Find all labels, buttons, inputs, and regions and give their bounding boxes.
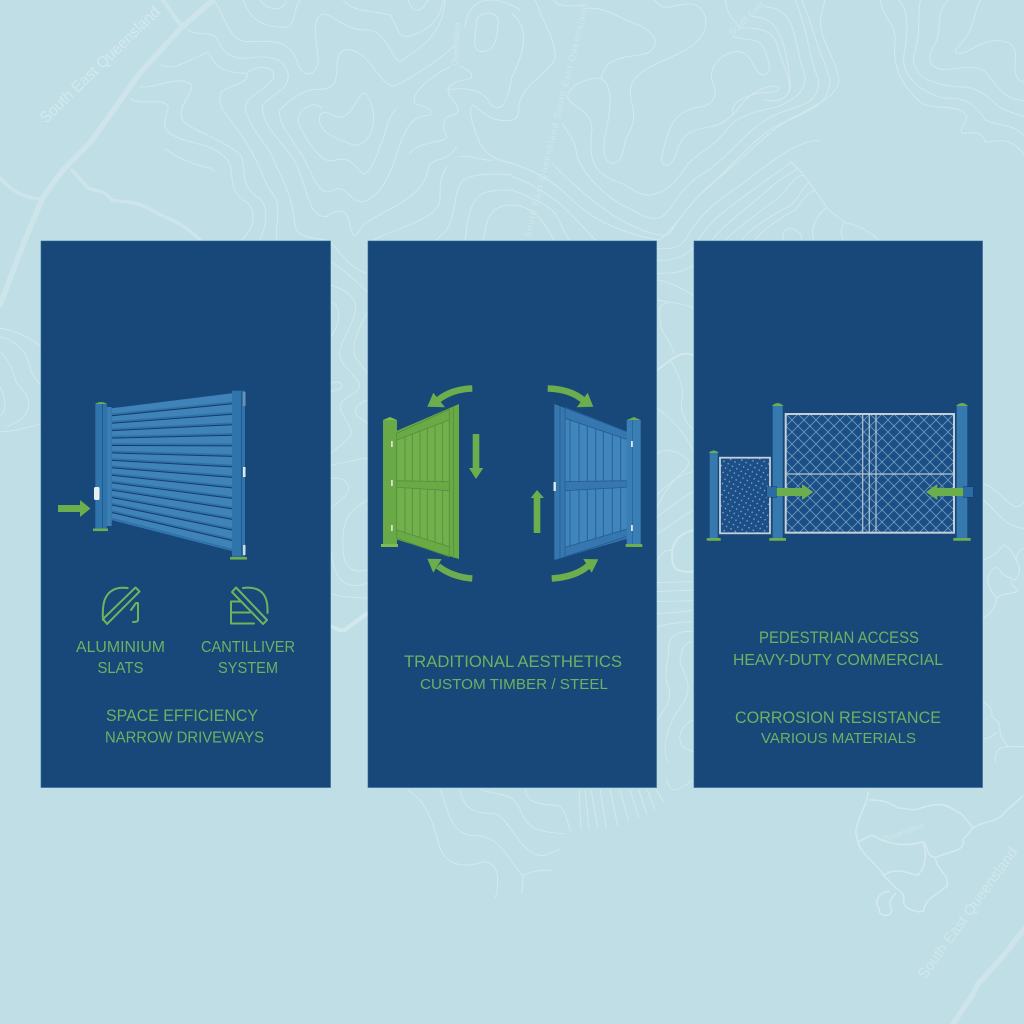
caption: pedestrian access: HEAVY-DUTY COMMERCIAL: [733, 652, 943, 669]
caption: traditional aesthetics: CUSTOM TIMBER / STEEL: [420, 676, 608, 693]
label: aluminium slats: [76, 639, 165, 677]
label: cantilever system: SYSTEM: [218, 660, 278, 677]
label: aluminium slats: ALUMINIUM: [76, 639, 165, 656]
chain-link gate illustration: [707, 403, 973, 541]
caption: corrosion resistance: CORROSION RESISTANCE: [735, 709, 941, 727]
arrows: gate closing: [777, 484, 963, 500]
caption: space efficiency: SPACE EFFICIENCY: [106, 707, 258, 725]
caption: pedestrian access: PEDESTRIAN ACCESS: [759, 629, 919, 647]
panel: chain-link gate: [694, 241, 982, 788]
topographic map background: Queensland: [450, 22, 462, 66]
arrows: swing direction: [427, 388, 598, 578]
caption: space efficiency: [105, 707, 264, 746]
topographic map background: South East Queensland South East Queensland: [522, 3, 590, 238]
panel: sliding gate: [41, 241, 330, 788]
green swing gate leaf: [381, 404, 459, 559]
caption: space efficiency: NARROW DRIVEWAYS: [105, 730, 264, 746]
topographic map background: South East Queensland: [914, 844, 1021, 982]
caption: corrosion resistance: VARIOUS MATERIALS: [761, 730, 916, 747]
caption: pedestrian access: [733, 629, 943, 669]
label: aluminium slats: SLATS: [98, 660, 144, 677]
caption: corrosion resistance: [735, 709, 941, 747]
icon: cantilever system: [231, 588, 268, 624]
label: cantilever system: [201, 639, 295, 677]
sliding gate illustration: [93, 391, 247, 560]
panel: swing gate: [368, 241, 656, 788]
topographic map background: South East Queensland: [37, 4, 164, 127]
caption: traditional aesthetics: [404, 652, 622, 693]
arrow: slide direction: [58, 500, 90, 517]
label: cantilever system: CANTILLIVER: [201, 639, 295, 656]
topographic map background: Queensland: [882, 821, 925, 844]
blue swing gate leaf: [554, 404, 642, 560]
icon: aluminium slats: [103, 588, 140, 624]
topographic map background: South East: [727, 0, 766, 37]
caption: traditional aesthetics: TRADITIONAL AESTHETICS: [404, 652, 622, 671]
